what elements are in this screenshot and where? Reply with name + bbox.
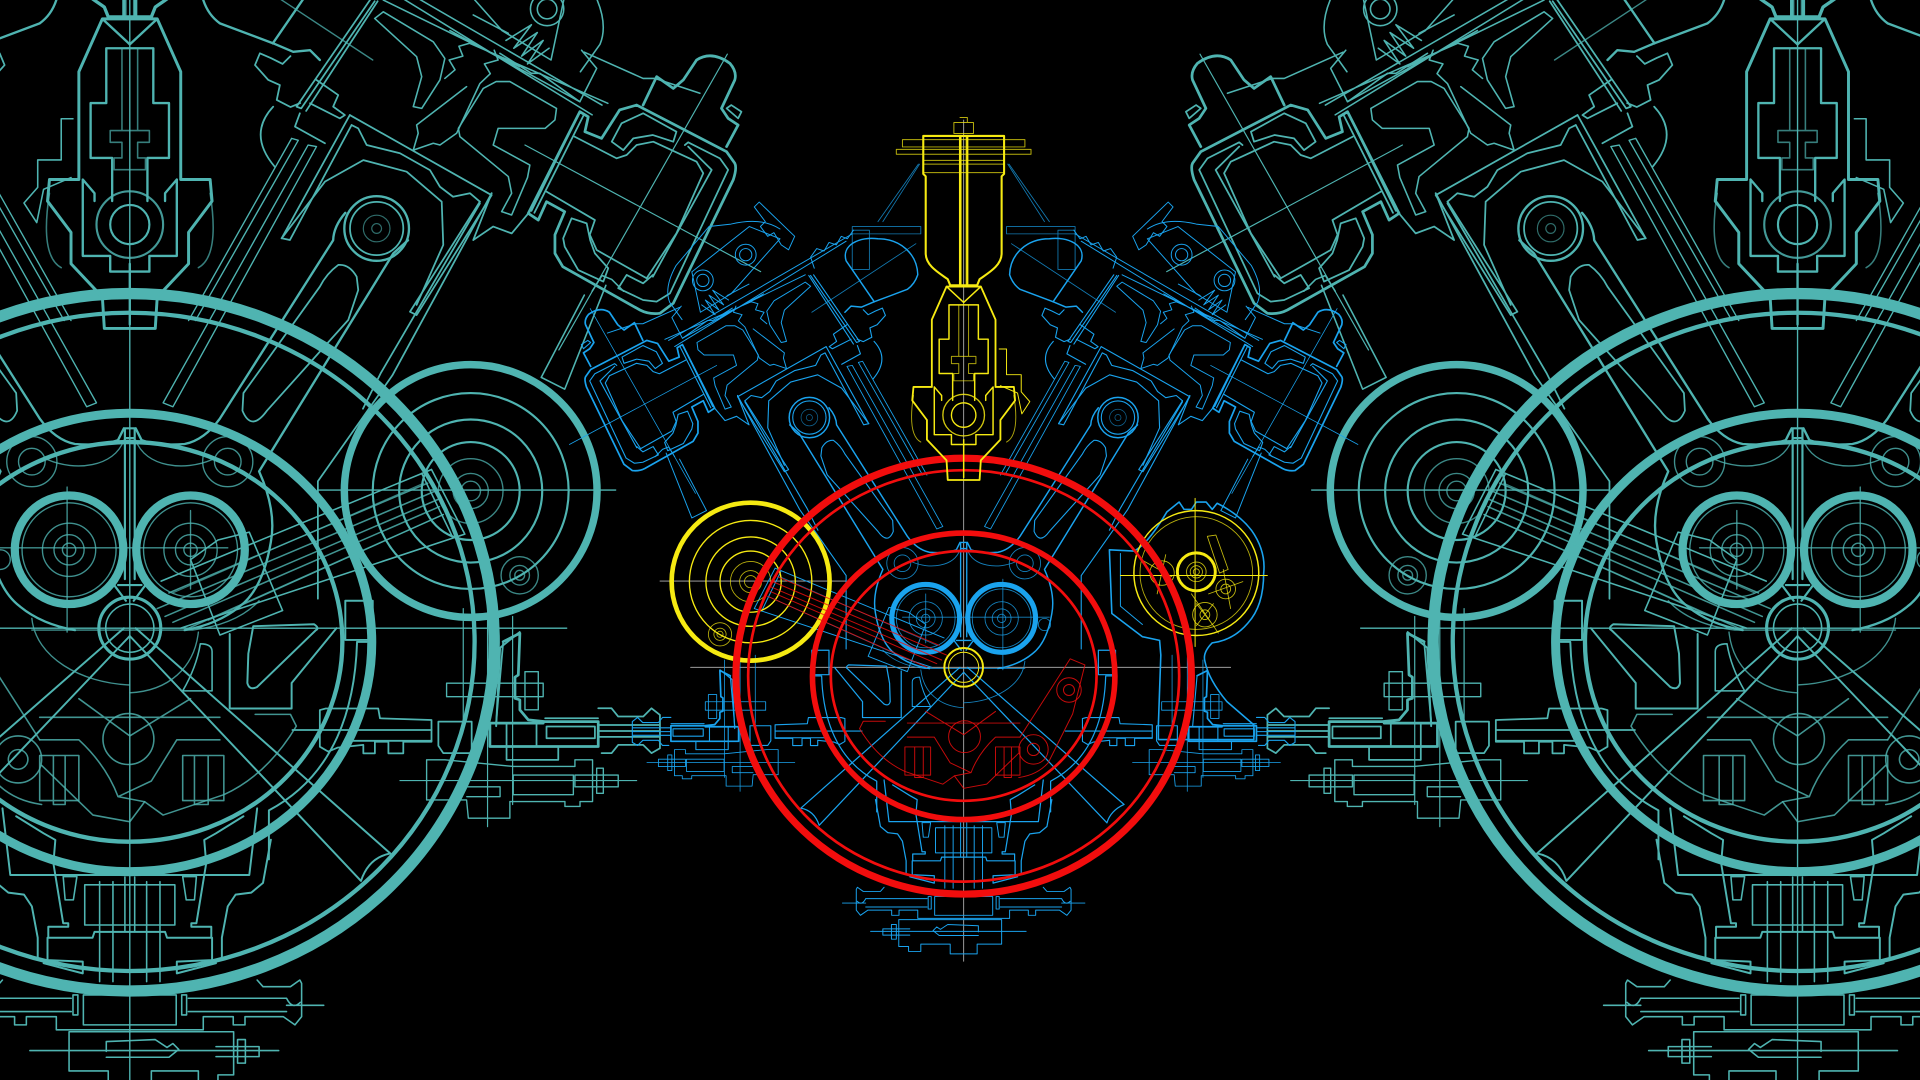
red flywheel rings and internals [736, 458, 1191, 894]
cylinder head casting [1213, 310, 1344, 471]
rod eye centre [1110, 409, 1126, 426]
piston housing [1042, 308, 1213, 649]
right pulley housing [1109, 502, 1264, 740]
bearing rings [943, 394, 984, 436]
yellow cylinder and hub [896, 118, 1031, 687]
outer flywheel ring [736, 458, 1191, 894]
twin cam rings [892, 584, 1036, 652]
left enlarged teal engine (mirrored) [0, 0, 761, 1080]
cam ring centres [883, 579, 1051, 708]
central colour engine [569, 118, 1358, 961]
right pulley gears [1141, 535, 1243, 633]
centre web and spokes [801, 542, 1124, 825]
left pulley rings [689, 520, 812, 643]
valve body inner [934, 287, 993, 478]
sump and gear case [964, 785, 1052, 883]
valve stem details [912, 305, 1016, 442]
cam carrier [1074, 202, 1358, 518]
centre lines [660, 120, 1231, 961]
crown bearing and arch [967, 548, 1041, 579]
right pulley [1120, 498, 1267, 647]
intake teardrop [1010, 238, 1082, 312]
outer thin ring [748, 470, 1179, 882]
mirrored copy of the block [569, 164, 964, 918]
left pulley hub rings [708, 561, 771, 646]
yellow pulleys [672, 498, 1267, 661]
cylinder bolt and flanges [896, 118, 1031, 285]
cylinder body [923, 136, 1004, 285]
timing belt and tensioner [754, 568, 944, 672]
long piston strips [984, 361, 1080, 529]
valve body outer [912, 287, 1015, 480]
block side brackets and lower arcs [964, 650, 1116, 822]
mirrored half of the block [964, 164, 1358, 918]
left pulley outer rim [672, 503, 830, 661]
left kidney casting [720, 665, 931, 729]
housing inner contour [1059, 375, 1160, 465]
side hook [999, 349, 1030, 414]
crank hub [944, 648, 983, 687]
blue engine block [569, 164, 1358, 954]
head inner contours [1068, 275, 1346, 463]
lower gear case [871, 920, 1026, 954]
inner thin ring [831, 551, 1097, 801]
inner thick ring [812, 533, 1115, 820]
shaft assembly [1065, 655, 1295, 791]
right enlarged teal engine [1167, 0, 1920, 1080]
crank internals [768, 577, 1085, 788]
connecting rod [967, 397, 1138, 669]
intake thin details [1007, 164, 1116, 312]
lower gear train [964, 823, 1085, 918]
